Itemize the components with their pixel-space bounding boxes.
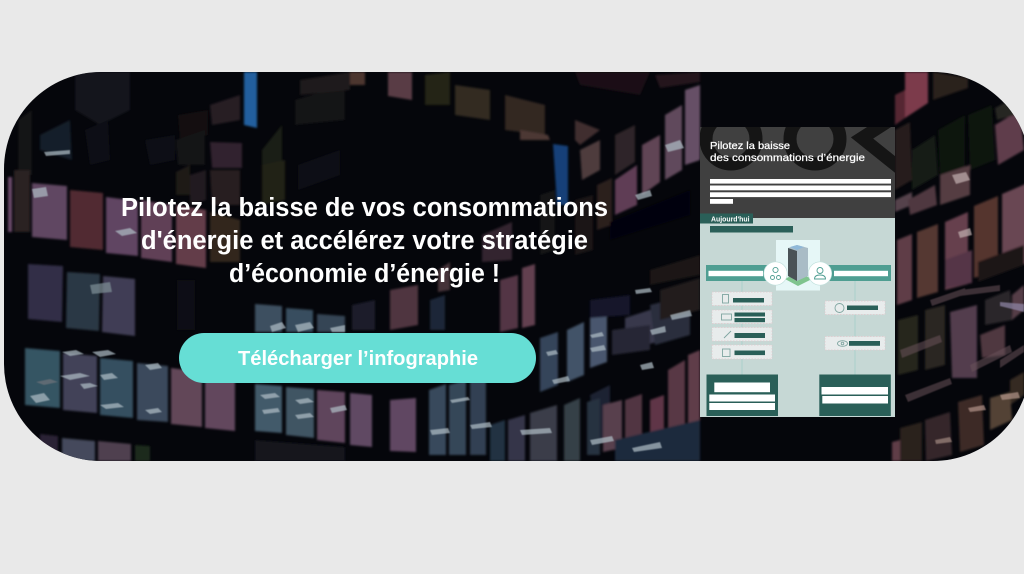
left result box [706, 374, 778, 416]
middle lower [500, 275, 518, 332]
right result box [819, 374, 891, 416]
row A [8, 177, 12, 232]
thumbnail title: des consommations d’énergie [710, 152, 865, 164]
connector lines [742, 281, 855, 375]
upper-left dim reflections [18, 72, 350, 205]
headline: d'énergie et accélérez votre stratégie [141, 227, 588, 255]
thumbnail title [710, 140, 865, 164]
headline [121, 194, 608, 288]
left item boxes [712, 292, 772, 359]
right column [895, 90, 905, 125]
blue panels [244, 72, 257, 128]
ceiling lights [30, 140, 1024, 452]
subheading bar [710, 226, 793, 232]
right item boxes [825, 301, 885, 350]
thumbnail intro text bars [710, 179, 891, 204]
background photo: office building at night [0, 72, 1024, 461]
row D [39, 433, 59, 452]
download button [179, 333, 536, 383]
row B [28, 264, 63, 322]
right teal band [820, 265, 891, 281]
icon: person [808, 262, 832, 285]
building illustration [776, 240, 820, 290]
left teal band [706, 265, 776, 281]
thumbnail title: Pilotez la baisse [710, 140, 790, 152]
thumbnail body panel [700, 218, 895, 417]
headline: d’économie d’énergie ! [229, 260, 500, 288]
thumbnail header panel [700, 127, 895, 218]
icon: people [764, 262, 787, 285]
infographic thumbnail [700, 114, 902, 417]
row C [25, 348, 60, 408]
middle upper [350, 72, 700, 262]
download button: Télécharger l’infographie [238, 348, 478, 370]
speckled reflections [900, 285, 1024, 402]
banner [4, 72, 1024, 461]
tab: Aujourd'hui: Aujourd'hui [711, 214, 750, 224]
headline: Pilotez la baisse de vos consommations [121, 194, 608, 222]
